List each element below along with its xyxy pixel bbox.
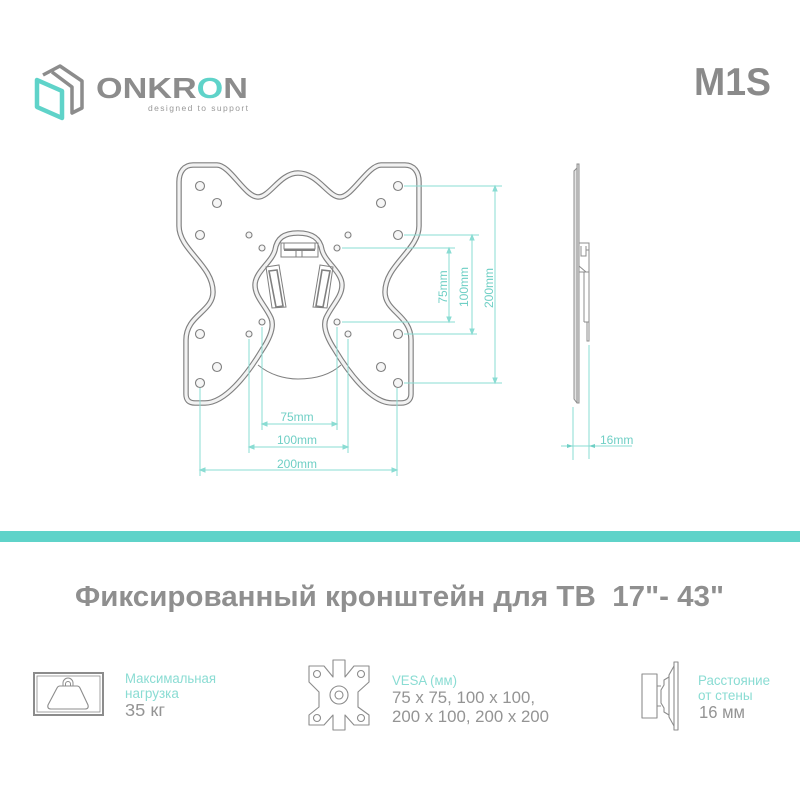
main heading: Фиксированный кронштейн для ТВ 17"- 43" [75, 581, 724, 613]
icon: side profile on wall [642, 662, 678, 730]
dimension label: 75mm horizontal: 75mm [280, 410, 314, 424]
icon: VESA plate [309, 660, 369, 730]
VESA sizes line 2: 200 x 100, 200 x 200 [392, 707, 549, 726]
load label: Максимальная [125, 671, 216, 686]
front view drawing of bracket plate [179, 165, 419, 403]
dimension label: 200mm vertical: 200mm [482, 268, 496, 308]
dimension label: 200mm horizontal: 200mm [277, 457, 317, 471]
spec: wall distance: от стены [698, 688, 753, 703]
dimension label: 100mm vertical: 100mm [457, 267, 471, 307]
dimension: 16mm side view [561, 345, 633, 460]
mounting holes [196, 182, 402, 388]
logo wordmark: ONKR ON [96, 73, 248, 105]
dimension lines: front view [200, 186, 502, 476]
spec: VESA [309, 660, 549, 730]
dimension label: 16mm: 16mm [600, 433, 633, 447]
spec: max load [34, 671, 216, 720]
center latch [281, 243, 318, 257]
VESA sizes line 1: 75 x 75, 100 x 100, [392, 688, 535, 707]
VESA label: VESA (мм) [392, 673, 457, 688]
model name: M1S [694, 61, 771, 104]
icon: weight on screen [34, 673, 103, 715]
load value: 35 кг [125, 700, 165, 720]
divider band [0, 531, 800, 542]
left hook slot [266, 265, 286, 308]
right hook slot [313, 265, 333, 308]
logo tagline: designed to support [148, 103, 249, 113]
logo: Onkron [37, 66, 249, 118]
spec: wall distance [642, 662, 770, 730]
dimension label: 75mm vertical: 75mm [436, 270, 450, 304]
plate outline [179, 165, 419, 403]
spec: max load: нагрузка [125, 686, 179, 701]
distance label: Расстояние [698, 673, 770, 688]
side view drawing of bracket [574, 164, 589, 403]
icon: logo cube [37, 66, 82, 118]
distance value: 16 мм [699, 702, 745, 722]
dimension label: 100mm horizontal: 100mm [277, 433, 317, 447]
